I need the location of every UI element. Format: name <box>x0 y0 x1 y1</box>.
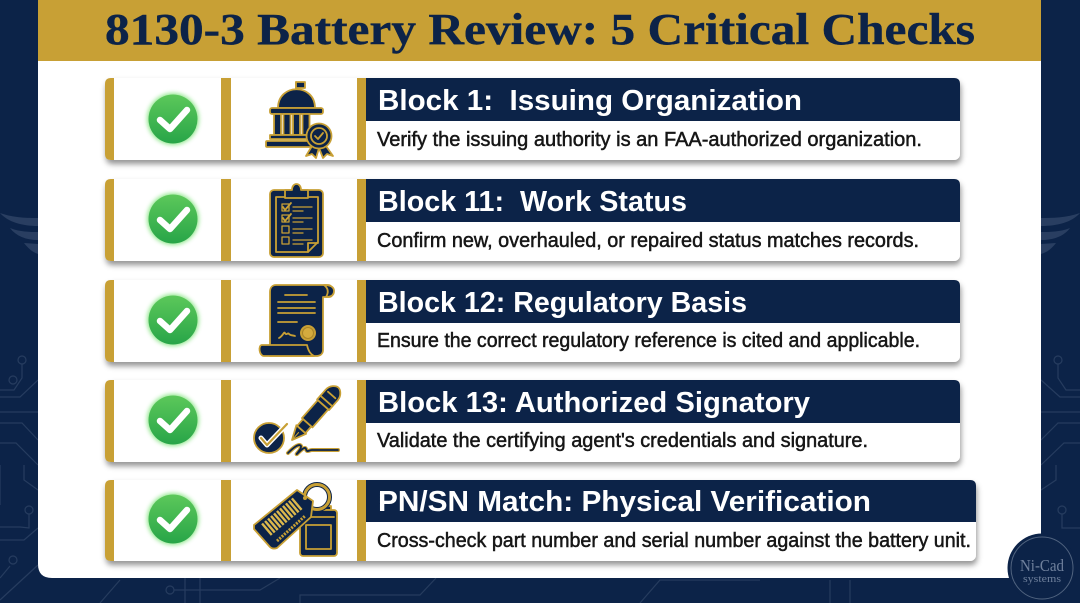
row 5 description: Cross-check part number and serial number against the battery unit. <box>377 530 971 552</box>
icon: clipboard checklist <box>270 184 323 257</box>
row 3 card <box>105 280 960 362</box>
row 1 description: Verify the issuing authority is an FAA-authorized organization. <box>377 129 922 151</box>
right circuit traces <box>1041 356 1080 528</box>
logo name: Ni-Cad <box>1020 556 1064 575</box>
row 2 heading: Block 11: Work Status <box>378 186 687 218</box>
row 1 heading: Block 1: Issuing Organization <box>378 85 802 117</box>
row 3 description: Ensure the correct regulatory reference is cited and applicable. <box>377 330 920 352</box>
row 4 check icon <box>147 394 199 446</box>
row 5: PN/SN match <box>105 480 976 561</box>
row 5 heading: PN/SN Match: Physical Verification <box>378 486 871 518</box>
row 3 heading: Block 12: Regulatory Basis <box>378 287 747 319</box>
icon: regulation scroll with seal <box>260 285 334 356</box>
row 5 card <box>105 480 976 561</box>
row 1 card <box>105 78 960 160</box>
row 1 check icon <box>147 93 199 145</box>
icon: fountain pen signing with check <box>254 382 344 454</box>
row 2: work status <box>105 179 960 261</box>
title banner <box>38 0 1041 61</box>
row 4 heading: Block 13: Authorized Signatory <box>378 387 810 419</box>
icon: government building with rosette <box>266 82 333 158</box>
logo subtitle: systems <box>1023 573 1061 585</box>
row 3: regulatory basis <box>105 280 960 362</box>
title: 8130-3 Battery Review: 5 Critical Checks <box>105 5 975 54</box>
row 1: issuing organization <box>105 78 960 160</box>
left wing emblem <box>0 213 38 254</box>
row 4 description: Validate the certifying agent's credentials and signature. <box>377 430 868 452</box>
row 4: authorized signatory <box>105 380 960 462</box>
row 4 card <box>105 380 960 462</box>
bottom circuit traces <box>100 578 850 603</box>
icon: battery with barcode tag <box>254 484 337 556</box>
logo badge <box>1008 534 1076 602</box>
row 2 card <box>105 179 960 261</box>
row 3 check icon <box>147 294 199 346</box>
right wing emblem <box>1041 213 1080 254</box>
row 2 description: Confirm new, overhauled, or repaired status matches records. <box>377 230 919 252</box>
row 5 check icon <box>147 493 199 545</box>
row 2 check icon <box>147 193 199 245</box>
left circuit traces <box>0 356 38 600</box>
